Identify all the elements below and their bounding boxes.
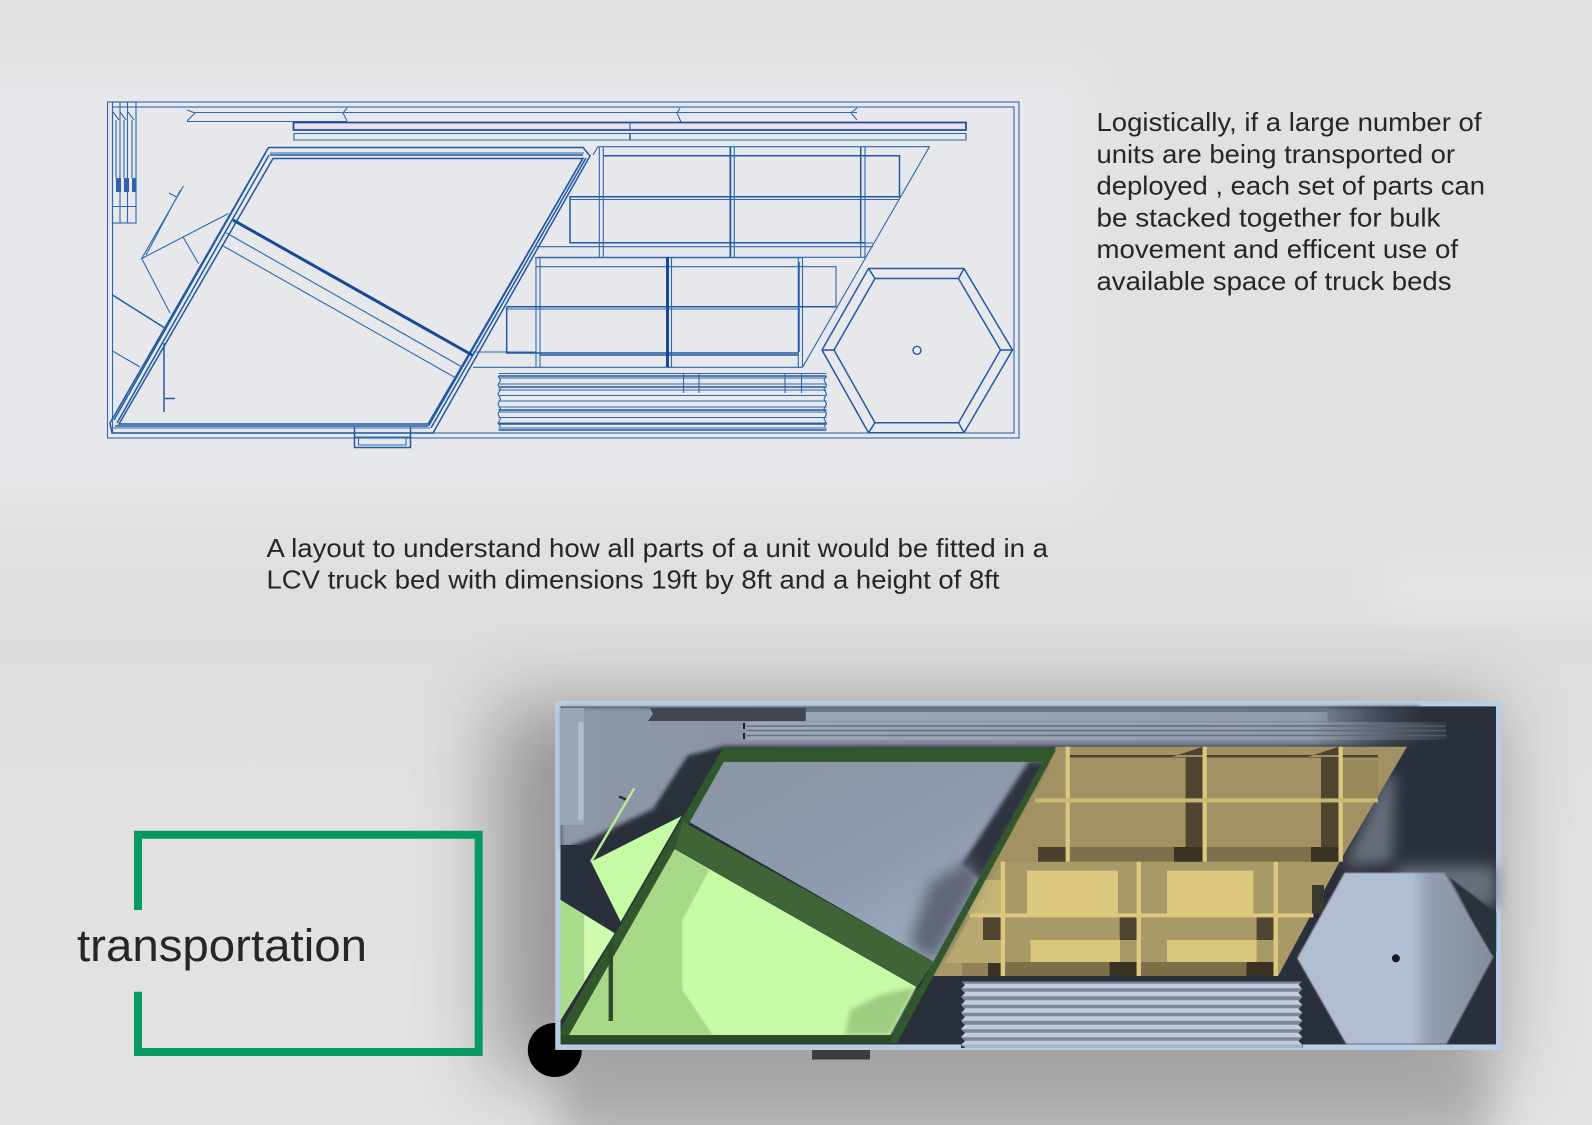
green frame — [561, 748, 1056, 1044]
left wedge, light green — [561, 900, 615, 1020]
pleated panel stack — [961, 981, 1302, 1048]
upper shelf shading — [1035, 747, 1378, 862]
paragraph: logistics: deployed , each set of parts can — [1096, 171, 1485, 201]
paragraph: logistics: movement and efficent use of — [1096, 234, 1459, 264]
tailgate tab on render — [812, 1050, 870, 1060]
bed floor — [561, 707, 1496, 1044]
truck bed outline — [108, 102, 1019, 438]
drop shadow of truck render — [495, 705, 1495, 1125]
paragraph: logistics: units are being transported or — [1096, 139, 1455, 169]
hexagon centre hole — [913, 346, 921, 354]
side panel stack — [561, 708, 584, 825]
upper shelf unit — [536, 147, 930, 367]
yellow shelf units — [928, 747, 1407, 976]
caption: LCV truck bed layout — [266, 533, 1049, 594]
hexagon panel — [1297, 873, 1493, 1044]
top strips — [648, 708, 1446, 740]
paragraph: logistics: available space of truck beds — [1096, 266, 1452, 296]
pleated panel stack — [498, 373, 826, 433]
upper floor panel, grey — [689, 762, 1048, 962]
lower shelf shading — [934, 862, 1340, 976]
lower floor panel, light green — [569, 849, 916, 1035]
folding flap, light green — [591, 788, 682, 922]
title: transportation: transportation — [77, 920, 367, 971]
hexagon panel — [822, 268, 1012, 433]
shadow along right edge of grey panel — [909, 762, 1048, 962]
vertical post — [609, 943, 613, 1021]
upper shelf dividers — [1035, 747, 1378, 862]
main parallelogram frame — [110, 148, 590, 433]
black circle marker — [528, 1023, 582, 1077]
folding flap lines — [112, 186, 228, 412]
green diagonal brace — [675, 822, 934, 987]
dark shadow beside frame — [655, 756, 723, 818]
lower shelf dividers — [970, 862, 1313, 976]
blueprint: truck bed wireframe layout — [108, 102, 1019, 448]
section title with green bracket — [77, 835, 479, 1052]
truck bed frame — [558, 704, 1498, 1047]
slim folded strip — [187, 108, 857, 122]
diagonal brace — [222, 220, 472, 378]
caption: LCV truck bed layout: A layout to understand how all parts of a unit would be fitted in a — [266, 533, 1049, 563]
green bracket — [138, 835, 479, 1052]
paragraph: logistics: be stacked together for bulk — [1096, 202, 1442, 232]
hexagon centre hole — [1392, 954, 1400, 962]
dark wedge right of hexagon — [1449, 877, 1496, 952]
caption: LCV truck bed layout: LCV truck bed with dimensions 19ft by 8ft and a height of 8ft — [266, 564, 1000, 594]
3D render: truck bed top view — [558, 704, 1498, 1048]
paragraph: logistics: Logistically, if a large number of — [1096, 107, 1482, 137]
paragraph: logistics — [1096, 107, 1485, 296]
stacked side panels, top left — [112, 102, 136, 223]
lower shelf unit — [473, 257, 836, 367]
tailgate tab — [354, 427, 410, 448]
long bars — [294, 122, 966, 140]
